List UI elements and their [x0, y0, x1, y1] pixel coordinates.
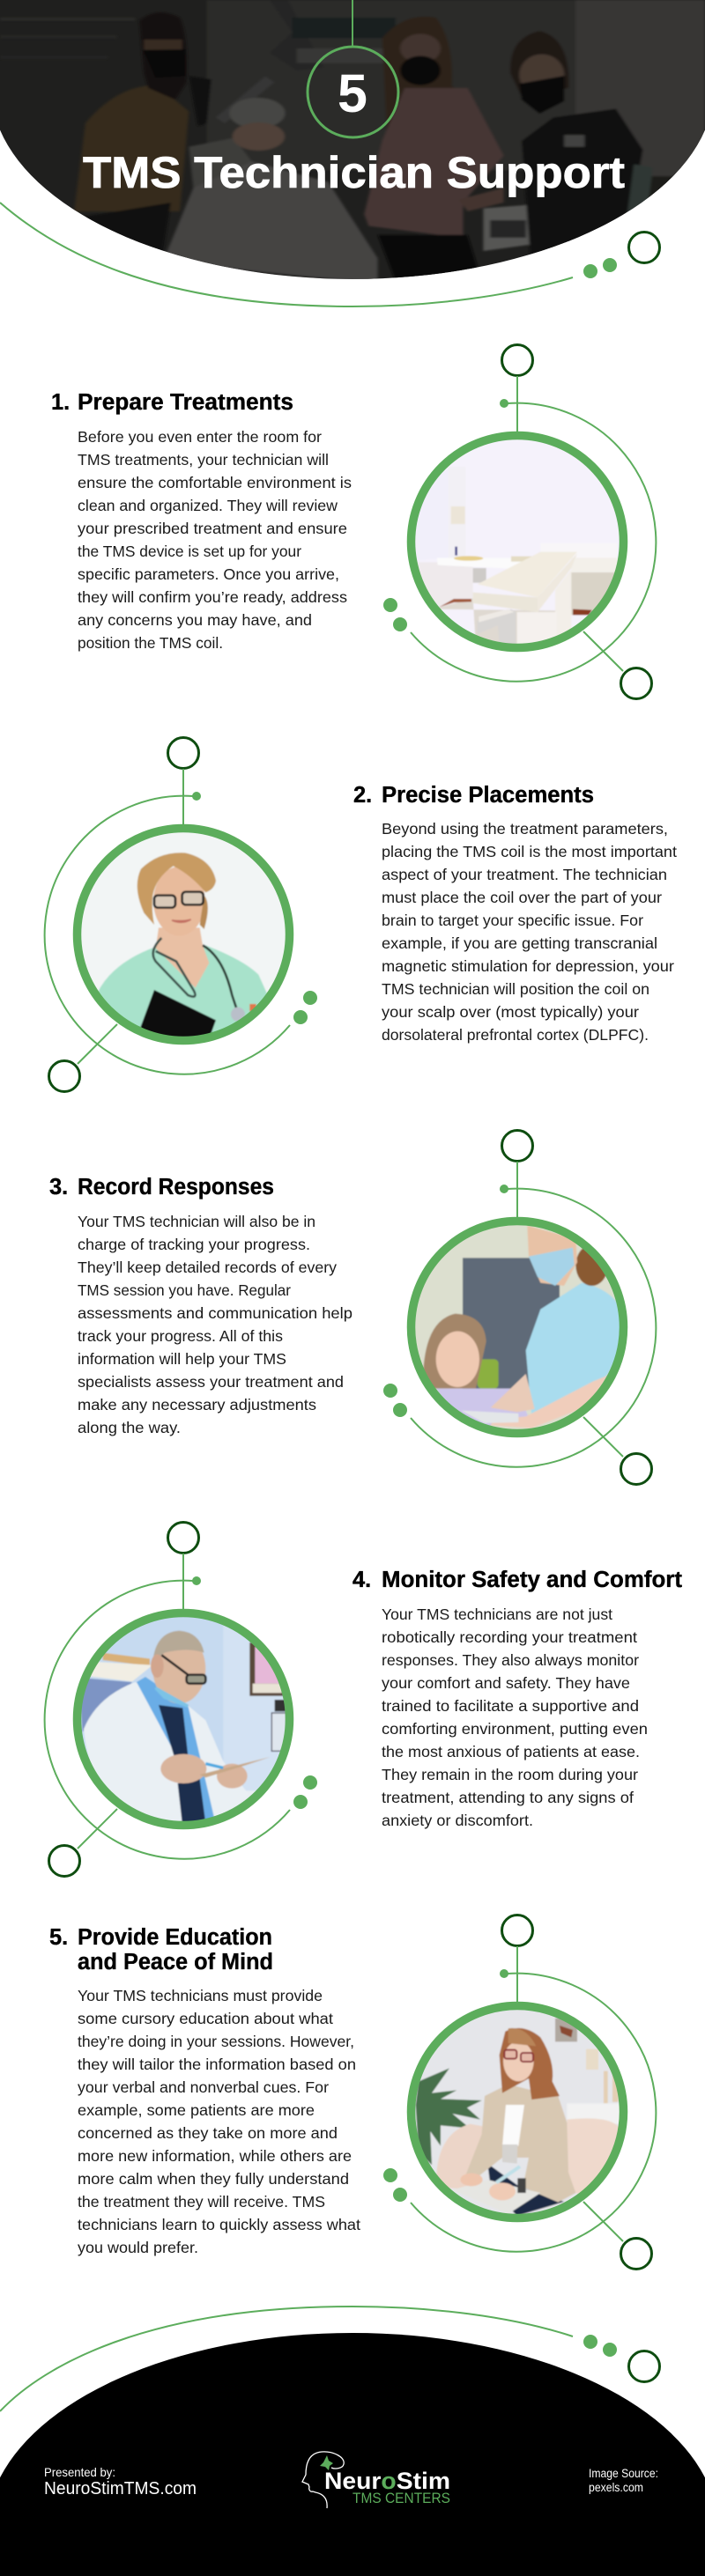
- text block: step 1: specific parameters. Once you arrive,: [78, 565, 339, 583]
- text block: step 2: magnetic stimulation for depression, your: [382, 957, 674, 975]
- text block: step 1: your prescribed treatment and ensure: [78, 520, 347, 537]
- panel: step 2 precise placements: [45, 738, 677, 1092]
- text block: step 5: more new information, while others are: [78, 2147, 352, 2165]
- text block: step 3: Your TMS technician will also be in: [78, 1213, 315, 1230]
- logo: NeuroStim TMS Centers: TMS CENTERS: [352, 2491, 450, 2506]
- text block: step 5: you would prefer.: [78, 2239, 198, 2256]
- text block: step 1: clean and organized. They will review: [78, 497, 338, 514]
- text block: step 3: charge of tracking your progress.: [78, 1236, 310, 1253]
- image source: Image Source:: [589, 2467, 658, 2480]
- heading: step 3: 3.: [49, 1175, 68, 1199]
- text block: step 4: your comfort and safety. They have: [382, 1674, 630, 1692]
- heading: step 3: Record Responses: [78, 1175, 274, 1199]
- text block: step 3: TMS session you have. Regular: [78, 1281, 291, 1299]
- text block: step 5: Your TMS technicians must provide: [78, 1987, 323, 2004]
- panel: step 3 record responses: [49, 1131, 656, 1485]
- photo: treatment room: [412, 438, 626, 649]
- text block: step 5: technicians learn to quickly assess what: [78, 2216, 360, 2233]
- heading: step 5: 5.: [49, 1925, 68, 1950]
- text block: step 1: TMS treatments, your technician will: [78, 451, 329, 469]
- text block: step 3: They’ll keep detailed records of every: [78, 1258, 337, 1276]
- text block: step 5: the treatment they will receive. TMS: [78, 2193, 325, 2211]
- header photo: dark team photograph in curved shape: [0, 0, 705, 282]
- text block: step 5: concerned as they take on more and: [78, 2124, 338, 2142]
- text block: step 2: dorsolateral prefrontal cortex (DLPFC).: [382, 1026, 649, 1044]
- heading: step 1: Prepare Treatments: [78, 390, 293, 415]
- text block: step 4: [382, 1605, 648, 1829]
- text block: step 3: track your progress. All of this: [78, 1327, 283, 1345]
- heading: step 4: Monitor Safety and Comfort: [382, 1568, 683, 1592]
- text block: step 1: [78, 428, 352, 652]
- heading: step 2: Precise Placements: [382, 783, 594, 808]
- text block: step 1: ensure the comfortable environment is: [78, 474, 352, 491]
- header dots and ring: [583, 233, 659, 278]
- footer panel: [0, 2307, 705, 2576]
- text block: step 2: brain to target your specific issue. For: [382, 912, 643, 929]
- title: TMS Technician Support: [83, 148, 625, 197]
- text block: step 5: example, some patients are more: [78, 2101, 315, 2119]
- text block: step 2: placing the TMS coil is the most important: [382, 843, 677, 860]
- text block: step 2: TMS technician will position the coil on: [382, 980, 649, 998]
- logo: NeuroStim TMS Centers: [302, 2452, 450, 2508]
- text block: step 2: Beyond using the treatment parameters,: [382, 820, 668, 838]
- text block: step 1: they will confirm you’re ready, address: [78, 588, 347, 606]
- text block: step 3: along the way.: [78, 1419, 181, 1436]
- text block: step 3: assessments and communication help: [78, 1304, 352, 1322]
- panel: step 1 prepare treatments: [51, 345, 656, 699]
- image source: pexels.com: [589, 2481, 643, 2494]
- text block: step 5: more calm when they fully understand: [78, 2170, 349, 2188]
- text block: step 3: [78, 1213, 352, 1436]
- connector line to number circle: [352, 0, 353, 46]
- text block: step 4: responses. They also always monitor: [382, 1651, 639, 1669]
- text block: step 2: [382, 820, 677, 1044]
- text block: step 3: make any necessary adjustments: [78, 1396, 316, 1413]
- decoration: step 3 ring and orbit: [383, 1131, 656, 1485]
- photo: masked technician with patient: [412, 1222, 626, 1436]
- text block: step 4: the most anxious of patients at ease.: [382, 1743, 640, 1760]
- text block: step 4: trained to facilitate a supportive and: [382, 1697, 639, 1715]
- photo: woman seated with notebook: [412, 2006, 626, 2221]
- panel: step 4 monitor safety and comfort: [45, 1522, 683, 1876]
- photo: doctor with clipboard: [81, 1617, 286, 1821]
- heading: step 2: 2.: [353, 783, 372, 808]
- text block: step 3: specialists assess your treatment and: [78, 1373, 344, 1391]
- text block: step 5: they’re doing in your sessions. However,: [78, 2033, 354, 2050]
- text block: step 4: anxiety or discomfort.: [382, 1812, 533, 1829]
- text block: step 4: They remain in the room during your: [382, 1766, 638, 1783]
- heading: step 5: Provide Education: [78, 1925, 272, 1950]
- panel: step 5 provide education: [49, 1915, 656, 2269]
- text block: step 5: [78, 1987, 360, 2256]
- text block: step 1: any concerns you may have, and: [78, 611, 312, 629]
- heading: step 5: [49, 1925, 273, 1974]
- header curved line: [0, 203, 573, 306]
- text block: step 5: your verbal and nonverbal cues. For: [78, 2078, 329, 2096]
- decoration: step 5 ring and orbit: [383, 1915, 656, 2269]
- text block: step 1: the TMS device is set up for your: [78, 543, 301, 560]
- number circle: [308, 47, 398, 137]
- text block: step 4: Your TMS technicians are not just: [382, 1605, 612, 1623]
- presented by: NeuroStimTMS.com: [44, 2479, 197, 2498]
- text block: step 5: they will tailor the information based on: [78, 2056, 356, 2073]
- text block: step 1: position the TMS coil.: [78, 634, 223, 652]
- text block: step 4: comforting environment, putting even: [382, 1720, 648, 1738]
- decoration: step 4 ring and orbit: [45, 1522, 317, 1876]
- heading: step 5: and Peace of Mind: [78, 1950, 273, 1974]
- image source: [589, 2467, 658, 2494]
- text block: step 5: some cursory education about what: [78, 2010, 333, 2027]
- footer dots and ring: [583, 2335, 659, 2381]
- text block: step 2: your scalp over (most typically) your: [382, 1003, 639, 1021]
- presented by: [44, 2465, 197, 2498]
- header panel: [0, 0, 705, 306]
- number circle: 5: [338, 63, 367, 123]
- photo: nurse with stethoscope: [81, 833, 286, 1037]
- text block: step 4: robotically recording your treatment: [382, 1628, 637, 1646]
- icon: head outline with neuron: [302, 2452, 344, 2508]
- presented by: Presented by:: [44, 2465, 115, 2479]
- text block: step 1: Before you even enter the room for: [78, 428, 322, 446]
- heading: step 4: 4.: [352, 1568, 371, 1592]
- text block: step 3: information will help your TMS: [78, 1350, 286, 1368]
- text block: step 2: aspect of your treatment. The technician: [382, 866, 667, 883]
- decoration: step 1 ring and orbit: [383, 345, 656, 699]
- logo: NeuroStim TMS Centers: NeuroStim: [324, 2468, 450, 2494]
- decoration: step 2 ring and orbit: [45, 738, 317, 1092]
- text block: step 4: treatment, attending to any signs of: [382, 1789, 634, 1806]
- footer black curved background: [0, 2333, 705, 2576]
- text block: step 2: example, if you are getting transcranial: [382, 934, 657, 952]
- heading: step 1: 1.: [51, 390, 70, 415]
- footer curved line: [0, 2307, 573, 2411]
- text block: step 2: must place the coil over the part of your: [382, 889, 662, 906]
